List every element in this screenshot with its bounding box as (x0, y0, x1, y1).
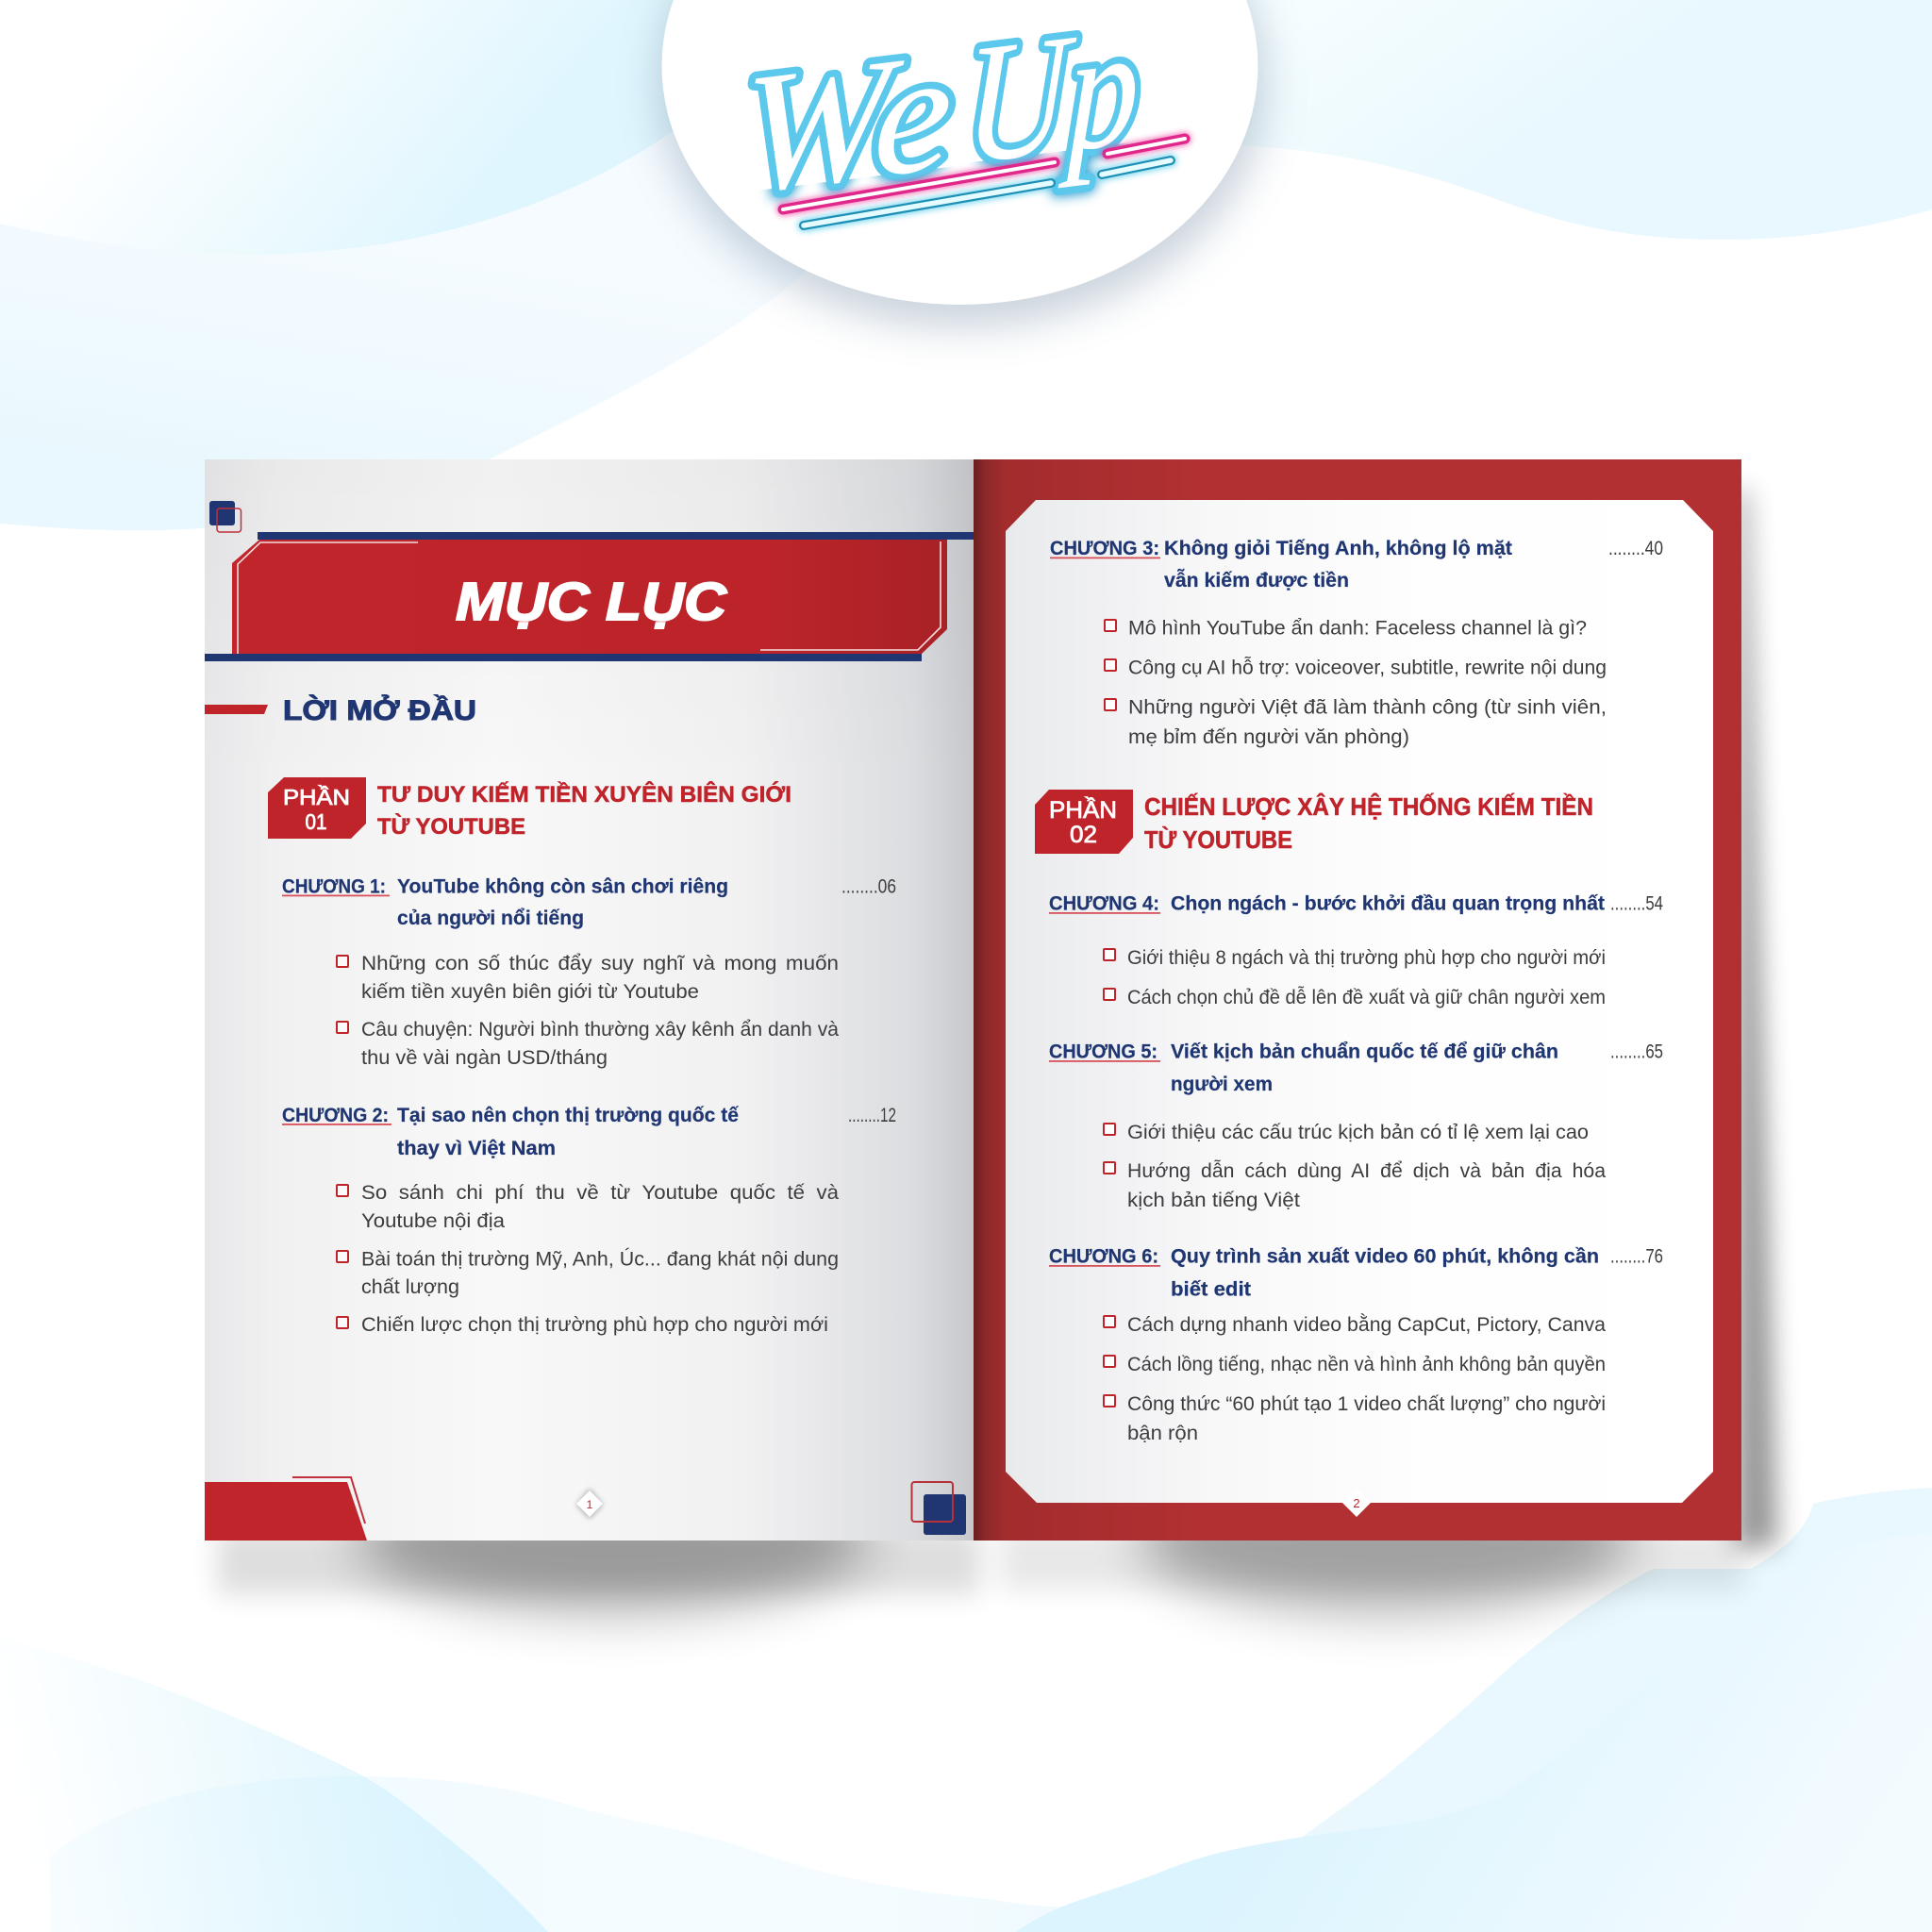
section heading 02: TỪ YOUTUBE (1144, 825, 1292, 854)
left page (205, 459, 974, 1541)
chapter 4: Chọn ngách - bước khởi đầu quan trọng nhất (1171, 892, 1605, 915)
chapter 6: biết edit (1171, 1277, 1251, 1300)
chapter 6: CHƯƠNG 6: (1049, 1245, 1158, 1268)
chapter 6 bullets: Cách lồng tiếng, nhạc nền và hình ảnh không bản quyền (1127, 1354, 1606, 1375)
chapter 3 (1050, 537, 1663, 591)
heading: Lời mở đầu (205, 694, 476, 726)
chapter 3 bullets: Mô hình YouTube ẩn danh: Faceless channel là gì? (1128, 617, 1587, 640)
chapter 5: người xem (1171, 1073, 1273, 1095)
chapter 6 bullets: Công thức “60 phút tạo 1 video chất lượng” cho người (1127, 1393, 1606, 1415)
logo: neon We Up lettering (741, 0, 1185, 230)
chapter 2 bullets: Chiến lược chọn thị trường phù hợp cho người mới (361, 1314, 828, 1336)
chapter 1: của người nổi tiếng (397, 907, 584, 929)
chapter 4 bullets (1104, 947, 1606, 1008)
logo: neon We Up lettering: We (741, 15, 954, 230)
chapter 2 bullets: Youtube nội địa (361, 1210, 505, 1232)
chapter 3 bullets: mẹ bỉm đến người văn phòng) (1128, 726, 1409, 748)
chapter 3: vẫn kiếm được tiền (1164, 568, 1349, 591)
section heading 01: TỪ YOUTUBE (377, 813, 525, 840)
heading: Lời mở đầu: LỜI MỞ ĐẦU (283, 694, 476, 726)
chapter 2 (282, 1104, 896, 1159)
chapter 6: Quy trình sản xuất video 60 phút, không cần (1171, 1245, 1599, 1268)
badge: Phần 02: 02 (1070, 822, 1097, 848)
chapter 2: Tại sao nên chọn thị trường quốc tế (397, 1104, 739, 1126)
chapter 3: Không giỏi Tiếng Anh, không lộ mặt (1164, 537, 1512, 559)
right page (974, 459, 1741, 1541)
chapter 1: CHƯƠNG 1: (282, 875, 386, 898)
book drop shadows (217, 491, 1777, 1613)
chapter 1: ........06 (841, 875, 896, 898)
chapter 5 (1049, 1040, 1663, 1095)
chapter 1 (282, 875, 896, 929)
chapter 4: CHƯƠNG 4: (1049, 892, 1159, 915)
white content panel (1006, 500, 1713, 1503)
chapter 5 bullets (1104, 1122, 1606, 1211)
chapter 6 bullets (1104, 1314, 1606, 1444)
chapter 1 bullets: Những con số thúc đẩy suy nghĩ và mong muốn (361, 953, 839, 974)
section heading 01 (377, 781, 791, 840)
chapter 3: CHƯƠNG 3: (1050, 537, 1159, 559)
chapter 4 bullets: Cách chọn chủ đề dễ lên đề xuất và giữ chân người xem (1127, 987, 1606, 1008)
chapter 5: Viết kịch bản chuẩn quốc tế để giữ chân (1171, 1040, 1558, 1062)
chapter 2: CHƯƠNG 2: (282, 1104, 389, 1126)
chapter 2 bullets: So sánh chi phí thu về từ Youtube quốc tế và (361, 1182, 839, 1204)
chapter 1 bullets: Câu chuyện: Người bình thường xây kênh ẩn danh và (361, 1019, 839, 1041)
chapter 2: thay vì Việt Nam (397, 1137, 556, 1159)
chapter 2 bullets: chất lượng (361, 1276, 459, 1298)
chapter 5: ........65 (1610, 1041, 1663, 1062)
badge: Phần 01: PHẦN (283, 784, 350, 809)
section heading 01: TƯ DUY KIẾM TIỀN XUYÊN BIÊN GIỚI (377, 781, 791, 808)
chapter 5 bullets: Giới thiệu các cấu trúc kịch bản có tỉ lệ xem lại cao (1127, 1122, 1589, 1143)
page number 2 (1342, 1489, 1371, 1517)
logo: neon We Up lettering: We (741, 15, 954, 230)
chapter 1 bullets: kiếm tiền xuyên biên giới từ Youtube (361, 981, 699, 1003)
footer shape: red corner (205, 1477, 367, 1541)
chapter 3 bullets: Công cụ AI hỗ trợ: voiceover, subtitle, rewrite nội dung (1128, 657, 1607, 679)
page number 1: 1 (587, 1498, 593, 1511)
chapter 2 bullets (337, 1182, 839, 1336)
logo: neon We Up lettering: We (741, 15, 954, 230)
corner squares: bottom right (911, 1482, 966, 1535)
chapter 3: ........40 (1608, 538, 1663, 559)
chapter 1: YouTube không còn sân chơi riêng (397, 875, 728, 898)
chapter 3 bullets (1105, 617, 1607, 748)
badge: Phần 01: 01 (306, 809, 326, 834)
section heading 02 (1144, 792, 1593, 854)
page number 2: 2 (1353, 1496, 1360, 1510)
chapter 4 bullets: Giới thiệu 8 ngách và thị trường phù hợp cho người mới (1127, 947, 1606, 969)
section heading 02: CHIẾN LƯỢC XÂY HỆ THỐNG KIẾM TIỀN (1144, 792, 1593, 821)
badge: Phần 02 (1035, 790, 1133, 854)
chapter 1 bullets (337, 953, 839, 1069)
title banner: MỤC LỤC (456, 572, 727, 632)
chapter 6 bullets: bận rộn (1127, 1423, 1198, 1444)
chapter 6 (1049, 1245, 1663, 1300)
logo badge: white ellipse with shadow (658, 0, 1266, 326)
corner squares: top left (209, 501, 242, 532)
badge: Phần 02: PHẦN (1049, 796, 1117, 824)
badge: Phần 01 (268, 777, 366, 839)
chapter 6: ........76 (1610, 1245, 1663, 1268)
chapter 5 bullets: kịch bản tiếng Việt (1127, 1190, 1300, 1211)
chapter 2: ........12 (848, 1105, 896, 1126)
chapter 3 bullets: Những người Việt đã làm thành công (từ sinh viên, (1128, 696, 1607, 719)
title banner (205, 532, 974, 661)
chapter 5 bullets: Hướng dẫn cách dùng AI để dịch và bản địa hóa (1127, 1160, 1606, 1182)
chapter 5: CHƯƠNG 5: (1049, 1040, 1158, 1062)
chapter 4: ........54 (1610, 892, 1663, 915)
page number 1 (576, 1489, 603, 1519)
chapter 2 bullets: Bài toán thị trường Mỹ, Anh, Úc... đang khát nội dung (361, 1249, 839, 1270)
chapter 1 bullets: thu về vài ngàn USD/tháng (361, 1047, 608, 1069)
chapter 6 bullets: Cách dựng nhanh video bằng CapCut, Pictory, Canva (1127, 1314, 1606, 1336)
